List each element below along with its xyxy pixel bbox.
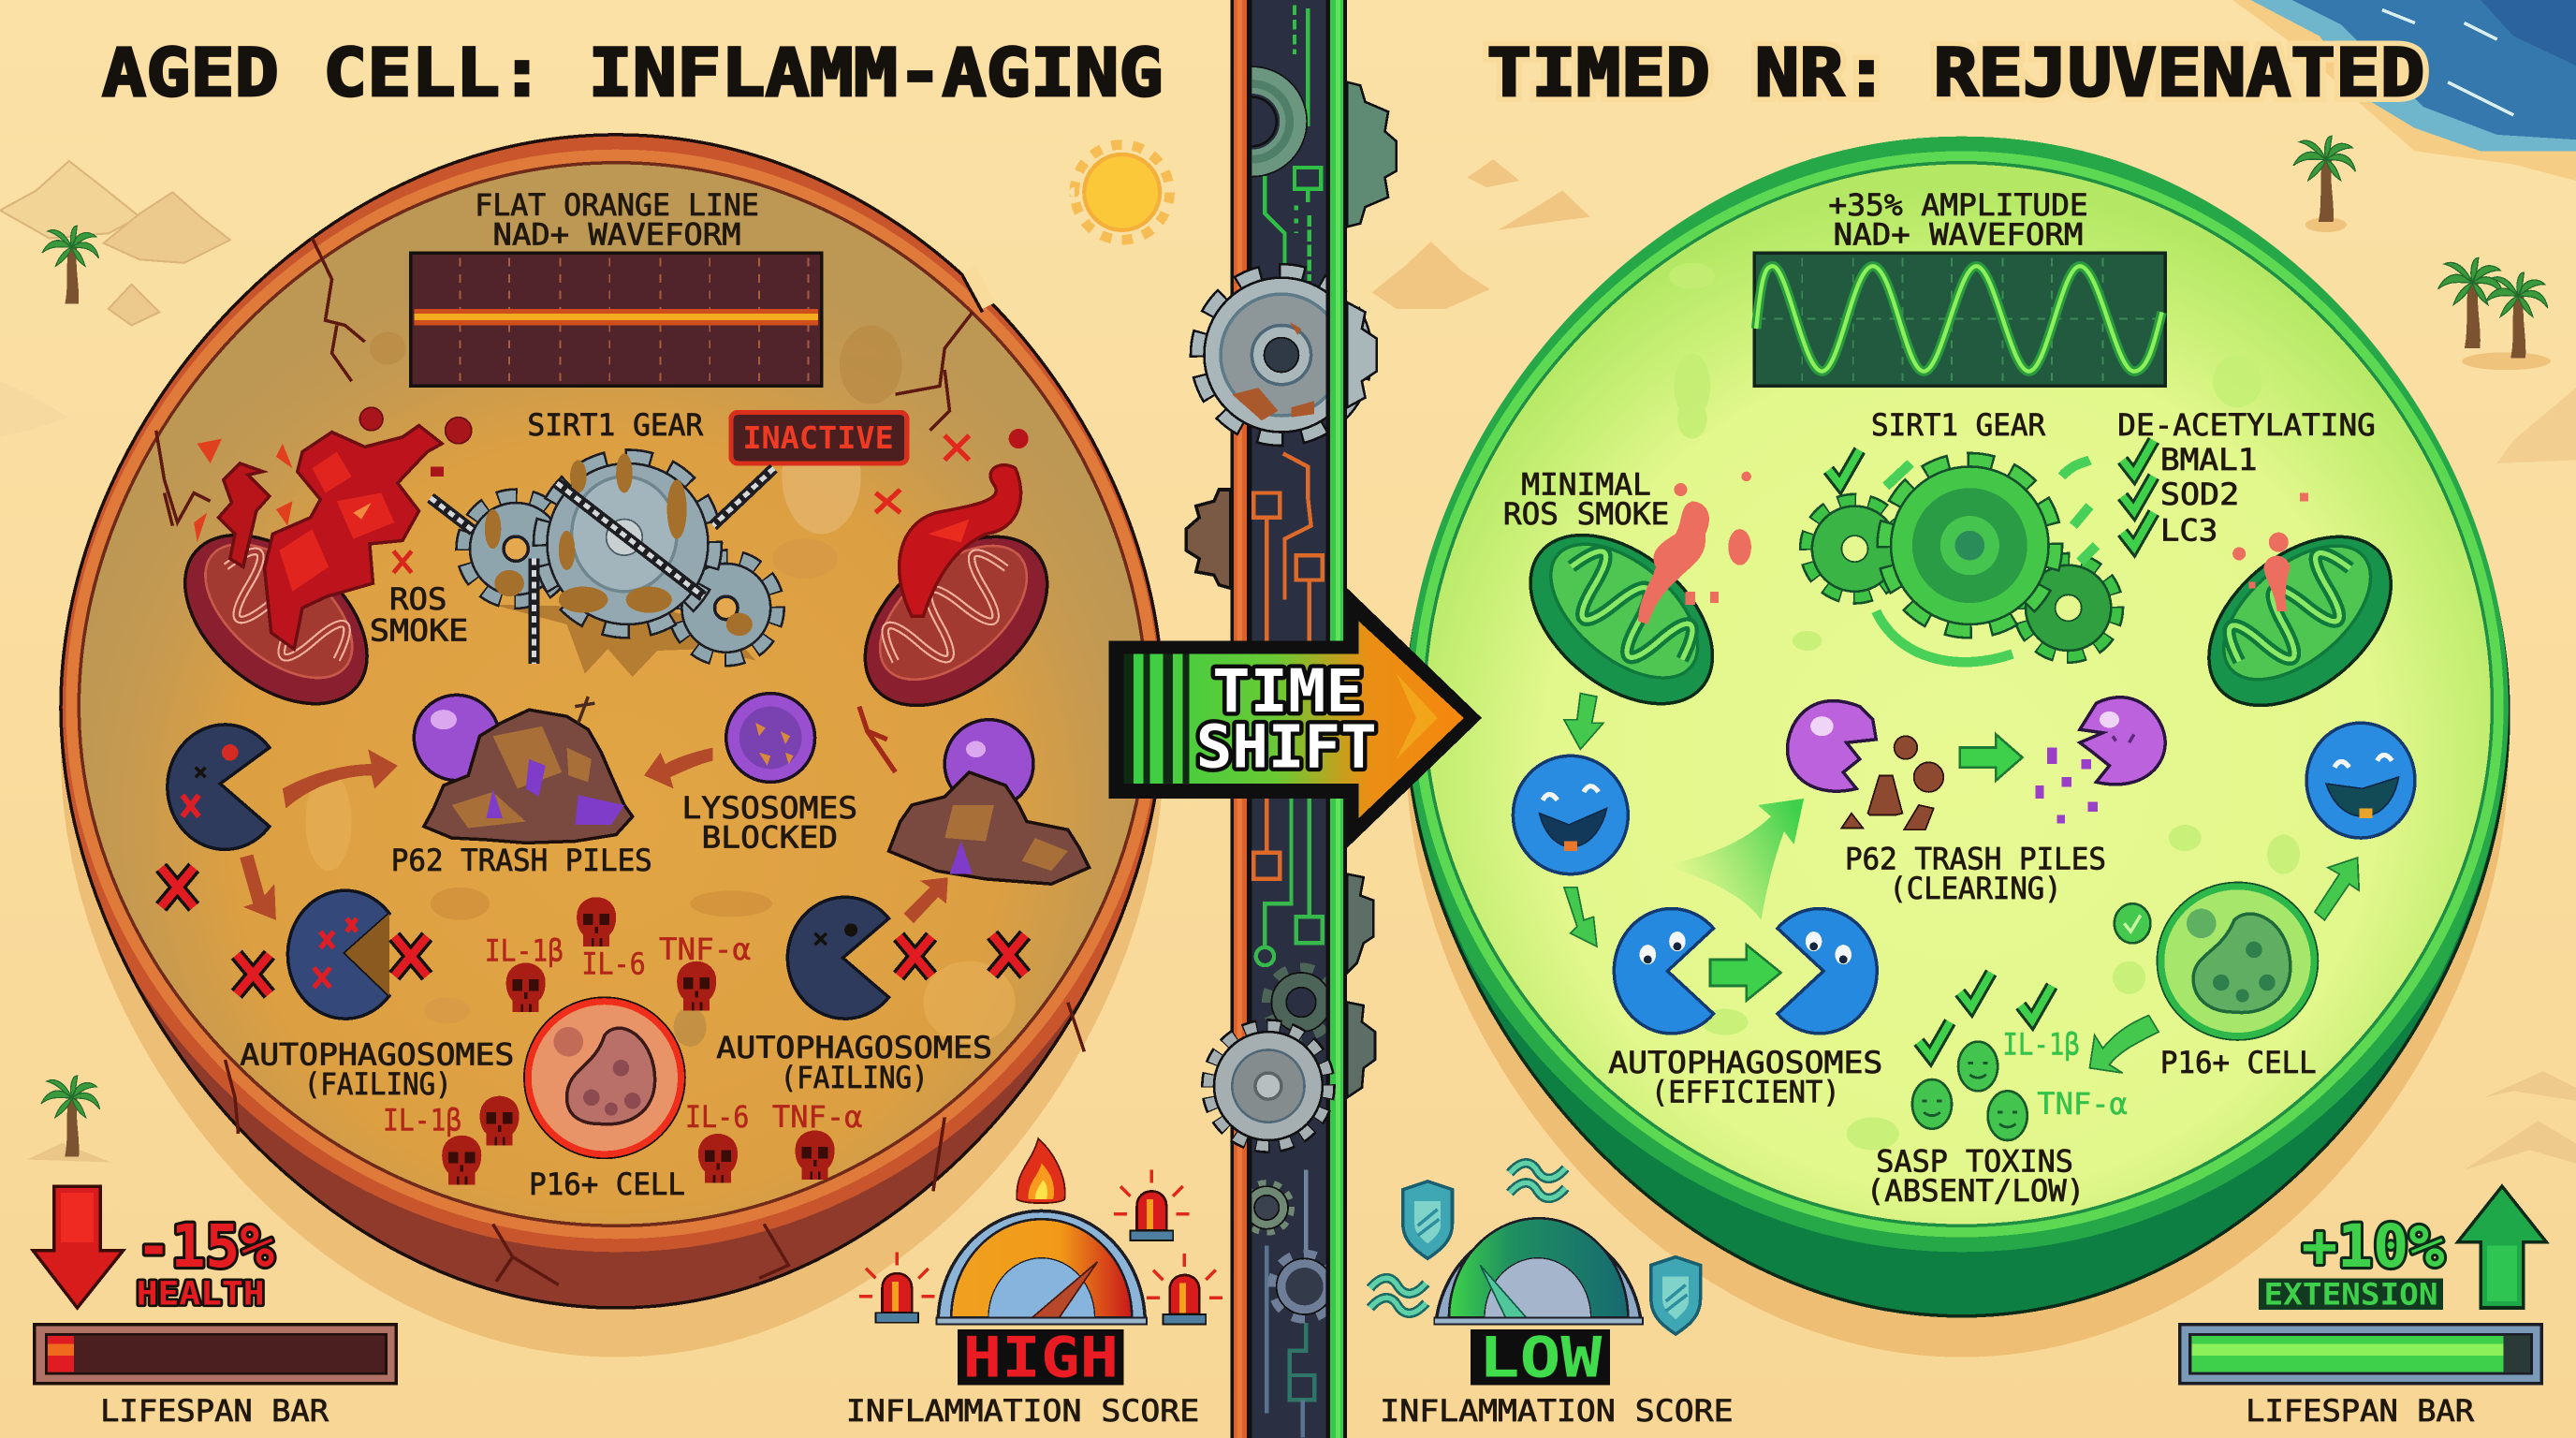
icons: calm waves [1370, 1163, 1566, 1313]
cytoplasm fill [1425, 163, 2492, 1225]
mitochondrion: left healthy [1499, 502, 1744, 738]
palm tree: lower left [27, 1076, 111, 1163]
gear: top green strip half [1251, 66, 1308, 178]
arrow: time shift [1109, 587, 1482, 849]
arrow: sweeping to lysosome [1660, 799, 1804, 920]
gear: olive lower [1244, 1184, 1290, 1231]
stat: +10% extension [2259, 1211, 2445, 1312]
SASP skulls [442, 897, 835, 1184]
P16+ senescent cell: red [524, 997, 685, 1158]
label: P16+ cell: P16+ CELL [2160, 1047, 2317, 1080]
arrow: clearing [1960, 734, 2022, 781]
label: SASP toxins: (ABSENT/LOW) [1866, 1175, 2085, 1209]
lysosome: blue smile right [2306, 723, 2415, 838]
gauge: high inflammation [936, 1211, 1147, 1325]
SASP labels: red: IL-1β [485, 935, 564, 969]
circuit traces: green lower [1256, 799, 1323, 965]
minimal ROS smoke: right [2232, 493, 2308, 611]
circuit traces: orange middle [1253, 453, 1323, 879]
label: lysosomes blocked: LYSOSOMES [681, 792, 857, 826]
chains [431, 468, 774, 664]
arrow: between autophagosomes [1710, 945, 1781, 1001]
labels: autophagosomes failing: (FAILING) [781, 1062, 929, 1095]
label: P62 trash clearing: (CLEARING) [1889, 873, 2062, 906]
autophagosome: efficient right [1778, 909, 1877, 1034]
lysosome: biting right [2080, 697, 2165, 785]
label: inflammation score right: INFLAMMATION SCORE [1380, 1395, 1734, 1429]
chart: flat NAD+ waveform [411, 253, 822, 386]
lifespan bar: aged [35, 1325, 396, 1384]
icon: flame [1017, 1138, 1065, 1203]
SASP labels: green: TNF-α [2037, 1088, 2128, 1122]
arrow: autophagosome to right pile [903, 877, 948, 923]
check badge [2115, 903, 2150, 943]
label: ROS smoke [370, 583, 468, 648]
autophagosome: lower left failing [287, 890, 389, 1019]
SASP labels: red: TNF-α [772, 1101, 862, 1135]
rotation arrows around gear [1876, 460, 2096, 662]
title: timed NR: TIMED NR: REJUVENATED [1486, 35, 2424, 111]
badge: inactive [731, 413, 907, 463]
label: inflammation score left: INFLAMMATION SCORE [846, 1395, 1199, 1429]
list: de-acetylating targets [2117, 409, 2376, 548]
circuit traces: slate bottom [1266, 1170, 1314, 1438]
arrow: lysosome to trash [644, 748, 713, 788]
label: minimal ROS smoke: ROS SMOKE [1503, 498, 1669, 532]
SASP labels: red [383, 933, 862, 1137]
purple debris [2036, 748, 2098, 823]
arrow: time shift: SHIFT [1196, 712, 1377, 782]
icons: shields [1403, 1181, 1701, 1334]
mitochondrion: right healthy [2177, 503, 2422, 739]
SASP labels: green: IL-1β [2002, 1029, 2080, 1063]
lysosome: biting left [1788, 701, 1876, 791]
panel: rejuvenated cell [1406, 143, 2509, 1357]
SASP checks [1919, 973, 2052, 1056]
SASP labels: red: IL-6 [685, 1101, 749, 1135]
labels: autophagosomes efficient: AUTOPHAGOSOMES [1608, 1047, 1882, 1080]
label: SASP toxins: SASP TOXINS [1876, 1145, 2073, 1179]
label: lifespan bar: LIFESPAN BAR [100, 1395, 329, 1429]
arrows: smile to autophagosome [1564, 888, 1597, 946]
labels: autophagosomes failing: (FAILING) [304, 1068, 452, 1102]
gear: lower gray [1211, 1029, 1325, 1143]
autophagosome: right failing [787, 897, 889, 1019]
stat: -15% health: -15% [137, 1211, 274, 1281]
autophagosome: efficient left [1614, 909, 1714, 1034]
labels: autophagosomes efficient [1608, 1047, 1882, 1110]
label: lysosomes blocked: BLOCKED [701, 822, 838, 856]
arrow: mito to smiling autophagosome [1564, 694, 1603, 749]
list: de-acetylating targets: LC3 [2160, 514, 2217, 548]
label: minimal ROS smoke [1503, 468, 1669, 532]
label: P62 trash clearing: P62 TRASH PILES [1845, 843, 2106, 876]
gear: slate bottom [1273, 1255, 1336, 1318]
lysosome: blue smile left [1513, 756, 1628, 874]
check: gear [1828, 450, 1860, 485]
label: SASP toxins [1866, 1145, 2085, 1209]
arrow: pacman to trash [240, 749, 398, 920]
badge: low: LOW [1479, 1327, 1602, 1391]
cytoplasm fill [79, 163, 1147, 1225]
mitochondrion: left damaged [154, 502, 399, 738]
X spark: left smoke [393, 551, 412, 573]
dunes: upper left [0, 161, 230, 437]
ocean corner [2232, 0, 2576, 181]
labels: autophagosomes failing: AUTOPHAGOSOMES [716, 1032, 992, 1065]
center divider: circuit strip [1186, 0, 1397, 1438]
label: +35% amplitude: +35% AMPLITUDE [1828, 189, 2088, 223]
pale blotches [1669, 263, 2300, 1151]
indicator: health down arrow [33, 1186, 124, 1308]
labels: autophagosomes efficient: (EFFICIENT) [1651, 1077, 1840, 1110]
circuit traces: green top [1265, 5, 1321, 281]
trash fragments clearing [1841, 736, 1943, 829]
lysosome: blocked center [726, 694, 815, 782]
icons: alarms [859, 1170, 1222, 1325]
stat: -15% health: HEALTH [137, 1274, 265, 1313]
gears: overhanging right edge [1347, 82, 1397, 1097]
orange membrane band [79, 163, 1147, 1225]
X marks [161, 868, 1025, 994]
badge: high: HIGH [963, 1327, 1119, 1391]
icon: chained rusty SIRT1 gears [431, 453, 774, 677]
SASP labels: red: IL-6 [581, 948, 646, 982]
list: de-acetylating targets: SOD2 [2160, 478, 2239, 512]
icon: active SIRT1 gears [1808, 463, 2115, 654]
stat: +10% extension: +10% [2302, 1211, 2445, 1281]
mitochondrion: right damaged [833, 503, 1079, 739]
title halo: timed NR: TIMED NR: REJUVENATED [1486, 35, 2424, 111]
arrow: time shift: TIME [1212, 656, 1364, 726]
lysosome: behind left trash pile [414, 695, 500, 781]
gear: dark green strip [1268, 969, 1334, 1035]
autophagosome: top left failing [168, 725, 270, 849]
trash pile: center [424, 697, 633, 843]
SASP smilies [1912, 1042, 2027, 1140]
label: flat orange line: FLAT ORANGE LINE [475, 189, 759, 223]
label: ROS smoke: ROS [389, 583, 446, 617]
cell shadow [61, 184, 1164, 1357]
cell shadow [1406, 184, 2509, 1357]
labels: autophagosomes failing [240, 1032, 992, 1102]
green stripe and black borders [1325, 0, 1347, 1438]
lifespan bar: rejuvenated [2180, 1325, 2541, 1384]
label: NAD+ waveform: NAD+ WAVEFORM [493, 218, 741, 252]
label: P16+ cell: P16+ CELL [529, 1168, 685, 1202]
palm trees: upper right [2293, 136, 2551, 370]
chart: oscillating NAD+ waveform [1754, 253, 2165, 386]
cell base rim [1406, 143, 2509, 1316]
trash pile and lysosome: right [889, 720, 1090, 884]
P16+ cell: green [2157, 882, 2318, 1040]
SASP labels: red: IL-1β [383, 1104, 461, 1137]
label: P62 trash clearing [1845, 843, 2106, 906]
arrow: P16 to toxins [2089, 1016, 2159, 1073]
title: aged cell: AGED CELL: INFLAMM-AGING [102, 35, 1164, 111]
rim break [963, 266, 996, 312]
label: SIRT1 gear: SIRT1 GEAR [1871, 409, 2046, 443]
dunes: right side [1372, 159, 2576, 1170]
labels: autophagosomes failing: AUTOPHAGOSOMES [240, 1038, 514, 1072]
blotches [305, 325, 1016, 1047]
indicator: extension up arrow [2458, 1186, 2546, 1308]
SASP labels: red: TNF-α [659, 933, 751, 967]
label: SIRT1 gear: SIRT1 GEAR [527, 409, 704, 443]
panel: aged cell [61, 135, 1164, 1357]
badge: inactive: INACTIVE [742, 419, 894, 456]
palm tree: upper left [42, 226, 98, 304]
label: NAD+ waveform: NAD+ WAVEFORM [1834, 218, 2083, 252]
stat: -15% health [137, 1211, 274, 1313]
cell base rim [61, 135, 1164, 1308]
label: lifespan bar right: LIFESPAN BAR [2246, 1395, 2475, 1429]
gear: main gray center [1201, 274, 1362, 435]
stat: +10% extension: EXTENSION [2263, 1278, 2438, 1312]
gear: rusty behind strip [1186, 490, 1231, 588]
gauge: low inflammation [1434, 1218, 1643, 1325]
ROS smoke: left [194, 407, 472, 649]
list: de-acetylating targets: DE-ACETYLATING [2117, 409, 2376, 443]
label: lysosomes blocked [681, 792, 857, 856]
list: de-acetylating targets: BMAL1 [2160, 444, 2257, 477]
label: P62 trash piles: P62 TRASH PILES [391, 844, 652, 878]
SASP labels: green [2002, 1029, 2128, 1122]
label: ROS smoke: SMOKE [370, 614, 468, 648]
sun icon [1075, 144, 1170, 240]
minimal ROS smoke: left [1638, 472, 1751, 624]
rim outline [61, 135, 1164, 1308]
cracks in membrane [156, 238, 1084, 1284]
arrow: P16 to blue [2315, 858, 2359, 920]
ROS smoke: right [875, 429, 1029, 616]
label: minimal ROS smoke: MINIMAL [1521, 468, 1651, 502]
green membrane band [1425, 163, 2492, 1225]
